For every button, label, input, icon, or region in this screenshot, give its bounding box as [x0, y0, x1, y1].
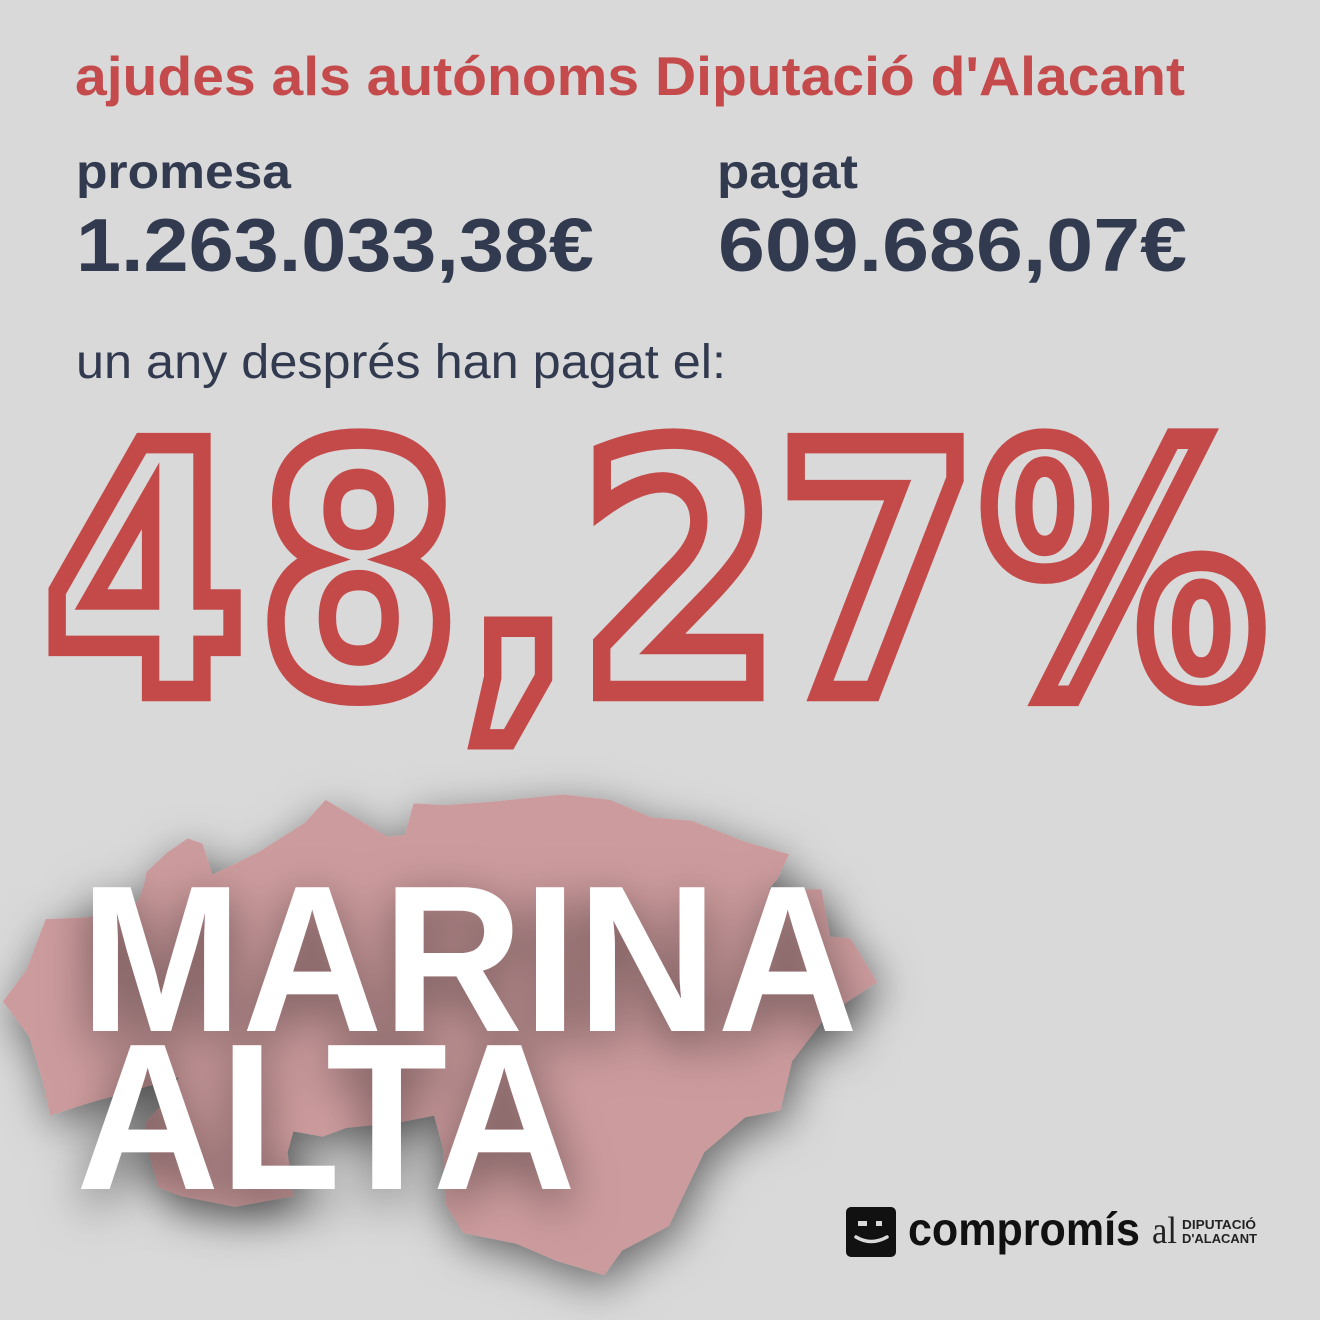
logos: [846, 1203, 1257, 1257]
title: ajudes als autónoms Diputació d'Alacant: [75, 45, 1185, 107]
logo: Diputació d'Alacant name: [1182, 1217, 1257, 1246]
region name: MARINA: [80, 843, 858, 1076]
big outlined percentage: %: [980, 377, 1266, 772]
big outlined percentage: 48,27: [44, 376, 978, 772]
amount: pagat: 609.686,07€: [718, 203, 1187, 287]
label: pagat: pagat: [717, 146, 858, 199]
map: Marina Alta: [3, 795, 877, 1275]
region name: ALTA: [76, 1001, 576, 1234]
logo: Diputació d'Alacant name: D'ALACANT: [1182, 1232, 1257, 1246]
logo: Diputació symbol: al: [1152, 1210, 1177, 1252]
subtitle: un any després han pagat el:: [76, 336, 726, 389]
logo: Diputació d'Alacant name: DIPUTACIÓ: [1182, 1217, 1256, 1232]
icon: Compromís smile: [846, 1207, 896, 1257]
logo: Compromís wordmark: compromís: [908, 1203, 1140, 1255]
amount: promesa: 1.263.033,38€: [76, 203, 594, 287]
label: promesa: promesa: [76, 146, 291, 199]
region name: [76, 843, 858, 1234]
